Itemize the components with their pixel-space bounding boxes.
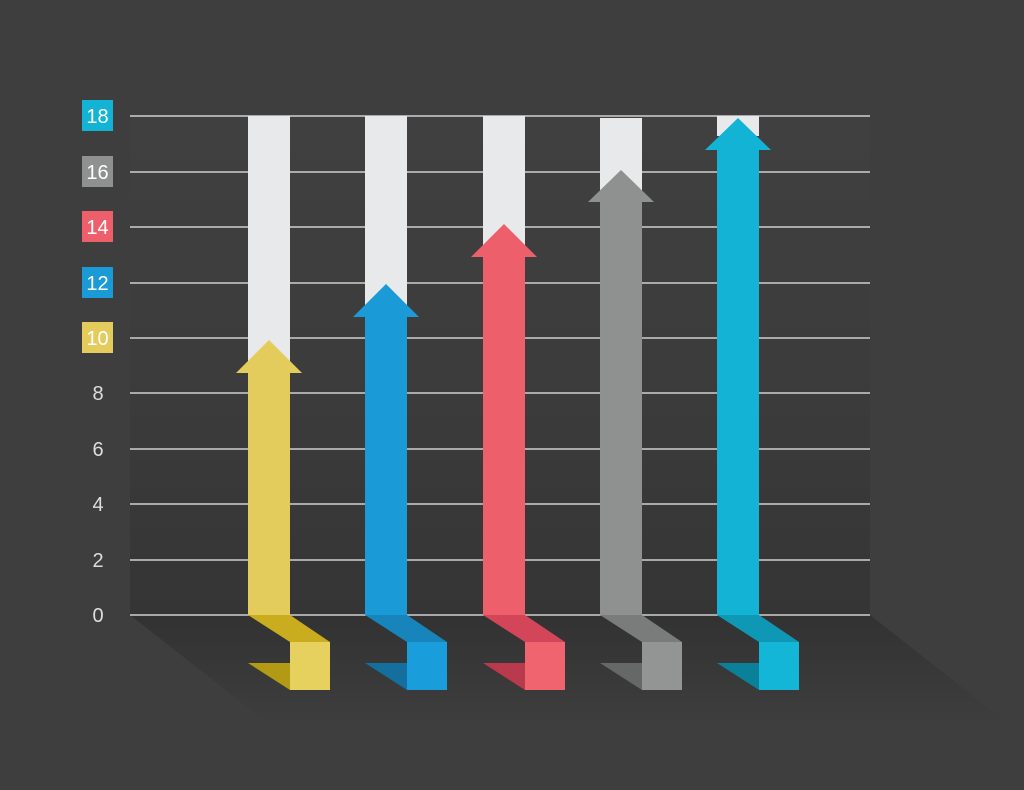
y axis labels: 16 — [86, 162, 109, 184]
arrow: yellow — [236, 116, 330, 690]
y axis labels: 8 — [92, 383, 104, 405]
y axis labels: 12 — [86, 273, 109, 295]
y axis labels: 4 — [92, 494, 104, 516]
chart panel — [130, 116, 870, 615]
arrow: blue — [353, 116, 447, 690]
y axis labels: 0 — [92, 605, 104, 627]
y axis labels: 18 — [86, 106, 109, 128]
y axis labels — [82, 100, 113, 627]
y axis labels: 14 — [86, 217, 109, 239]
floor shadow — [130, 615, 1010, 725]
y axis labels: 6 — [92, 439, 104, 461]
y axis labels: 2 — [92, 550, 104, 572]
arrow: gray — [588, 118, 682, 690]
arrow: red — [471, 116, 565, 690]
y axis labels: 10 — [86, 328, 109, 350]
arrow: cyan — [705, 116, 799, 690]
